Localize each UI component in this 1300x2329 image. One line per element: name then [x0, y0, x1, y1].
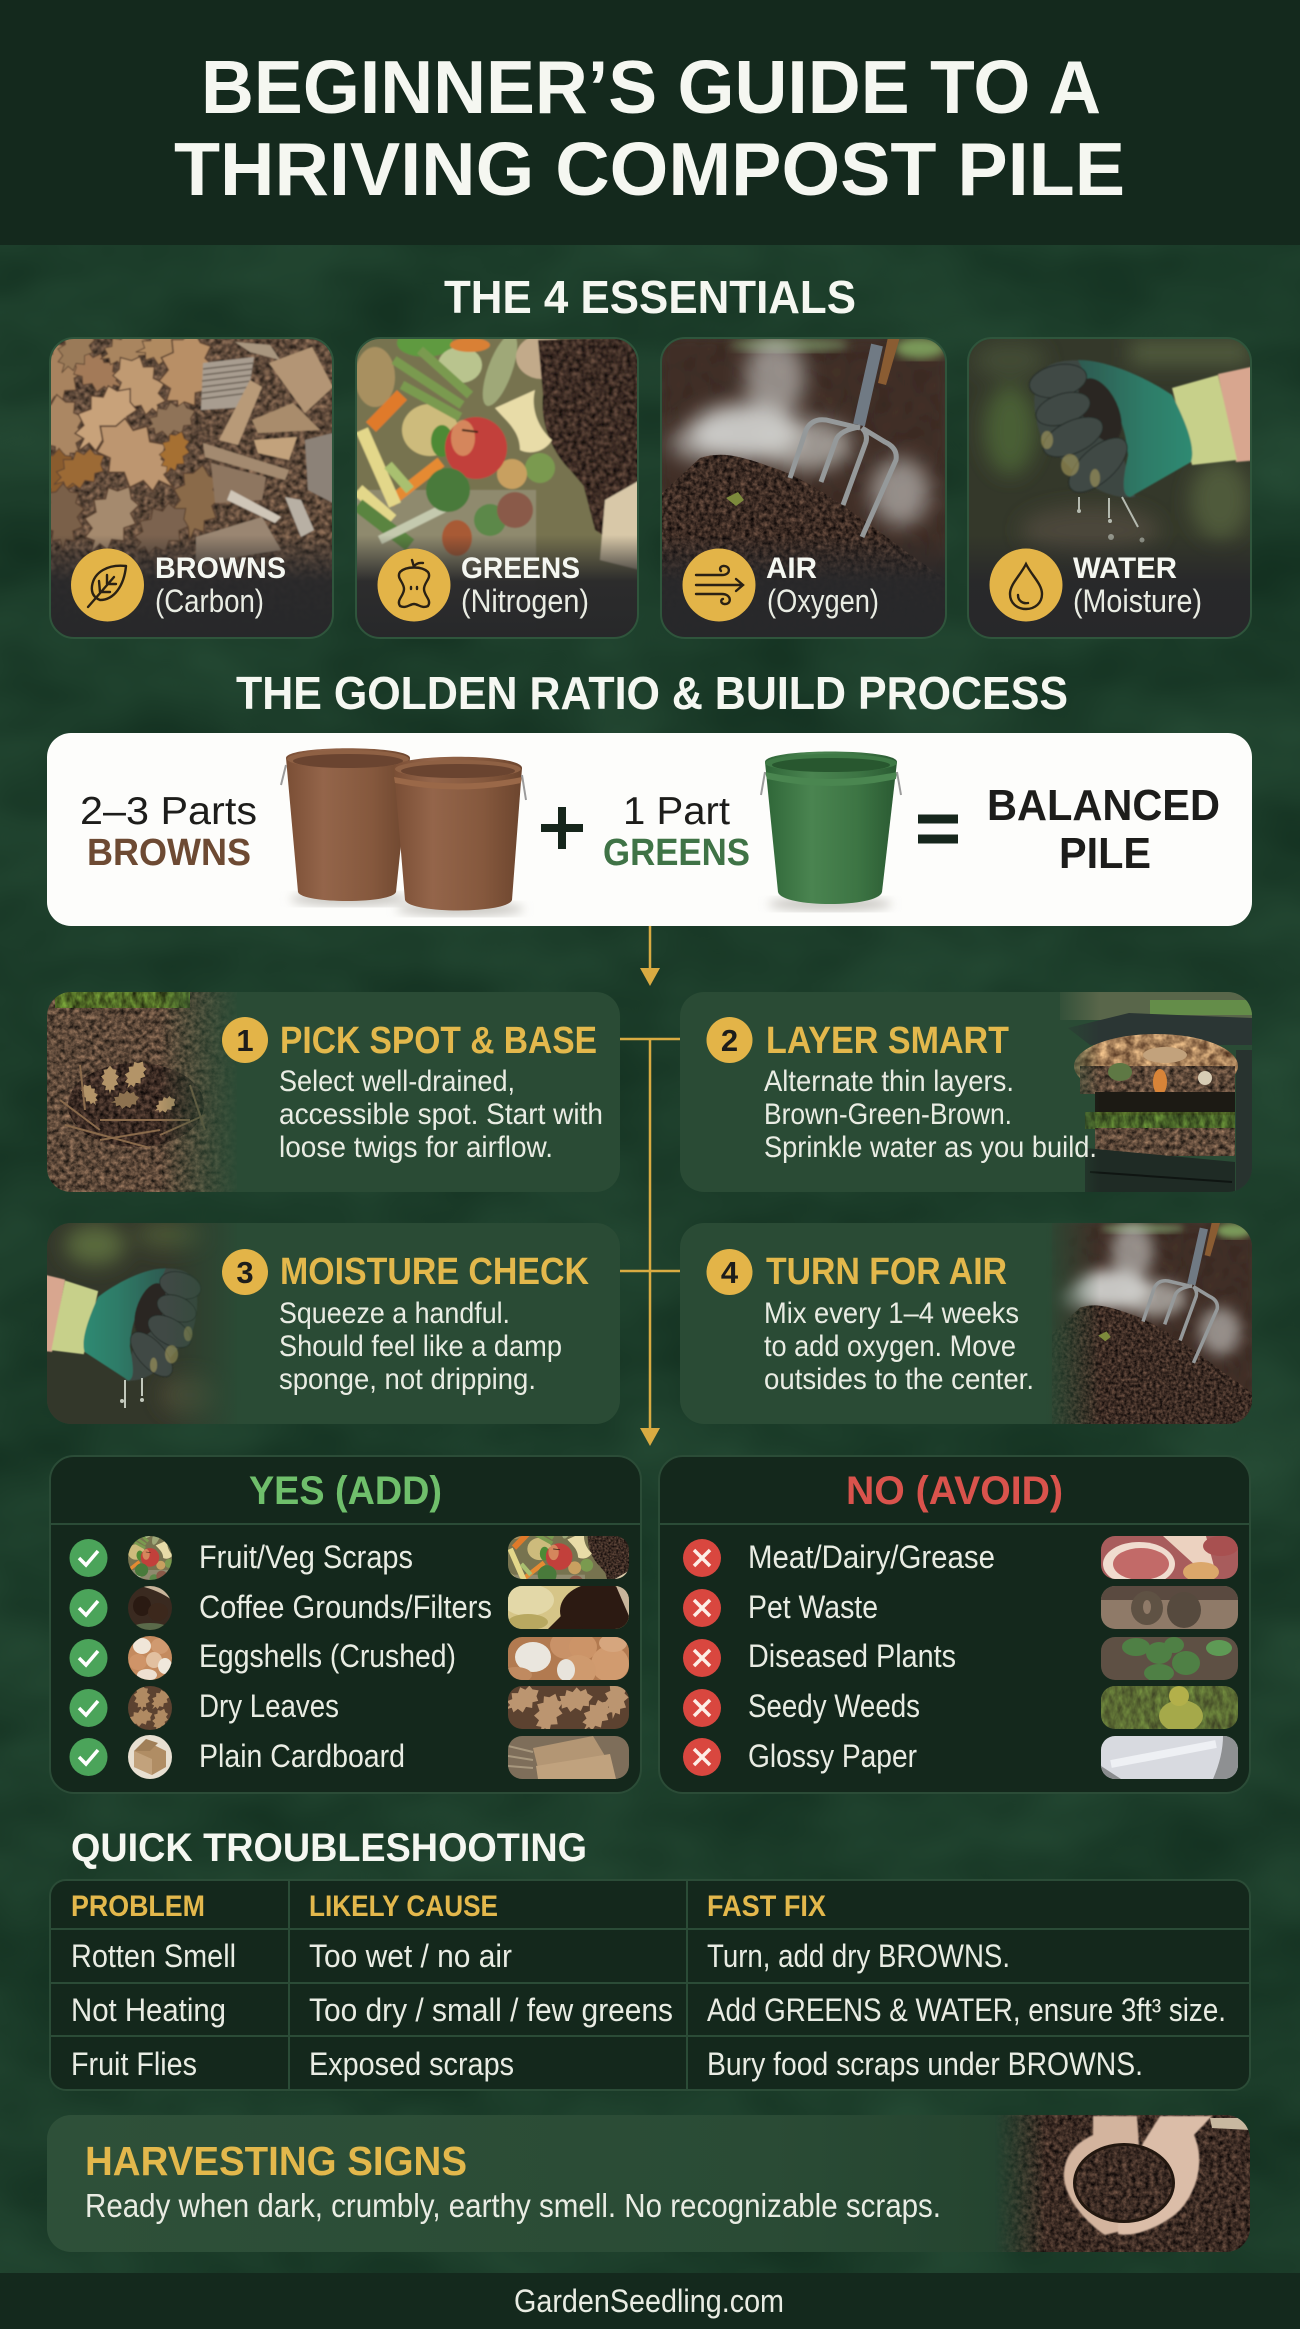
heading: yes: YES (ADD): [249, 1469, 442, 1513]
table row: rotten smell: [71, 1938, 1010, 1974]
step number 4: 4: [721, 1255, 739, 1290]
heading: harvesting signs: HARVESTING SIGNS: [85, 2138, 467, 2184]
step number 1: 1: [236, 1023, 254, 1058]
step text: [764, 1065, 1097, 1164]
row: fruit/veg scraps: [70, 1536, 629, 1580]
photo: hands holding compost: [995, 2115, 1250, 2252]
step number 3: [222, 1249, 268, 1295]
table row: not heating: Not Heating: [71, 1992, 226, 2028]
label: balanced pile: PILE: [1059, 829, 1151, 878]
table row: fruit flies: Exposed scraps: [309, 2046, 514, 2082]
row: glossy paper: Glossy Paper: [748, 1738, 917, 1774]
label: air: AIR: [766, 552, 817, 585]
table header: [71, 1890, 826, 1923]
label: 1 part greens: [603, 790, 750, 874]
table row: rotten smell: Rotten Smell: [71, 1938, 236, 1974]
title: [174, 45, 1125, 211]
step title: LAYER SMART: [766, 1020, 1009, 1062]
row: glossy paper: [683, 1736, 1238, 1779]
step number 4: [706, 1249, 752, 1295]
card: greens: [355, 329, 640, 640]
heading: quick troubleshooting: QUICK TROUBLESHOOTING: [71, 1826, 587, 1870]
table row: rotten smell: Too wet / no air: [309, 1938, 512, 1974]
table header: FAST FIX: [707, 1890, 826, 1923]
row: plain cardboard: [70, 1735, 629, 1779]
step 4 card: [680, 1223, 1253, 1435]
row: seedy weeds: Seedy Weeds: [748, 1688, 920, 1724]
label: browns: BROWNS: [155, 552, 286, 585]
step text: Should feel like a damp: [279, 1330, 562, 1363]
label: 2-3 parts browns: 2–3 Parts: [80, 790, 257, 833]
panel: harvesting signs: [47, 2115, 1250, 2252]
row: eggshells: [70, 1636, 629, 1680]
step text: accessible spot. Start with: [279, 1098, 603, 1131]
row: plain cardboard: Plain Cardboard: [199, 1738, 405, 1774]
label: greens: (Nitrogen): [461, 583, 589, 619]
table row: fruit flies: [71, 2046, 1143, 2082]
label: greens: [461, 552, 589, 619]
arrow: ratio to steps: [640, 926, 660, 986]
step 1 card: [47, 992, 620, 1192]
step text: [279, 1065, 603, 1164]
card: water: [968, 338, 1260, 638]
row: meat: Meat/Dairy/Grease: [748, 1539, 995, 1575]
step text: loose twigs for airflow.: [279, 1131, 553, 1164]
table: troubleshooting: [50, 1880, 1250, 2090]
step text: Brown-Green-Brown.: [764, 1098, 1012, 1131]
photo: twig base: [47, 992, 240, 1192]
label: browns: [155, 552, 286, 619]
text: harvesting signs: Ready when dark, crumbly, earthy smell. No recognizable scraps.: [85, 2187, 941, 2224]
step text: [279, 1297, 562, 1396]
icon: two brown buckets: [281, 748, 526, 916]
step text: Sprinkle water as you build.: [764, 1131, 1097, 1164]
step text: sponge, not dripping.: [279, 1363, 536, 1396]
table row: not heating: Add GREENS & WATER, ensure 3ft³ size.: [707, 1992, 1226, 2028]
label: air: (Oxygen): [767, 583, 879, 619]
plus sign: [541, 807, 583, 849]
step text: Mix every 1–4 weeks: [764, 1297, 1019, 1330]
heading: the 4 essentials: THE 4 ESSENTIALS: [444, 271, 856, 323]
step title: TURN FOR AIR: [766, 1251, 1007, 1293]
icon: water drop: [990, 548, 1062, 622]
table row: fruit flies: Fruit Flies: [71, 2046, 197, 2082]
label: greens: GREENS: [461, 552, 580, 585]
row: dry leaves: Dry Leaves: [199, 1688, 339, 1724]
label: 2-3 parts browns: [80, 790, 257, 874]
step 3 card: [35, 1221, 620, 1424]
process flow connector: [620, 1039, 680, 1446]
table row: rotten smell: Turn, add dry BROWNS.: [707, 1938, 1010, 1974]
equals sign: [918, 819, 958, 839]
label: air: [766, 552, 879, 619]
row: diseased plants: Diseased Plants: [748, 1638, 956, 1674]
panel: yes (add): [50, 1456, 641, 1793]
icon: wind: [682, 548, 756, 622]
table row: fruit flies: Bury food scraps under BROWNS.: [707, 2046, 1143, 2082]
row: coffee grounds: [70, 1586, 629, 1630]
card: browns: [49, 337, 334, 639]
step 2 card: [680, 992, 1252, 1192]
step title: MOISTURE CHECK: [280, 1251, 589, 1293]
label: 2-3 parts browns: BROWNS: [87, 832, 251, 874]
label: water: (Moisture): [1073, 583, 1202, 619]
step number 1: [222, 1017, 268, 1063]
heading: no: NO (AVOID): [846, 1469, 1063, 1513]
table row: not heating: [71, 1992, 1226, 2028]
heading: golden ratio: THE GOLDEN RATIO & BUILD PROCESS: [236, 667, 1068, 719]
card: air: [660, 337, 947, 640]
panel: no (avoid): [659, 1456, 1250, 1793]
label: water: [1073, 552, 1202, 619]
label: 1 part greens: 1 Part: [623, 790, 730, 833]
table header: PROBLEM: [71, 1890, 205, 1923]
icon: apple core: [378, 548, 450, 622]
step text: Squeeze a handful.: [279, 1297, 510, 1330]
photo: fork in steaming compost: [1052, 1223, 1252, 1424]
step text: to add oxygen. Move: [764, 1330, 1016, 1363]
footer: [0, 2273, 1300, 2329]
step title: PICK SPOT & BASE: [280, 1020, 597, 1062]
row: coffee grounds: Coffee Grounds/Filters: [199, 1589, 492, 1625]
step text: Alternate thin layers.: [764, 1065, 1014, 1098]
photo: gloved hand: [47, 1223, 213, 1424]
footer: GardenSeedling.com: [514, 2283, 784, 2319]
label: balanced pile: [987, 781, 1220, 878]
icon: green bucket: [761, 752, 901, 911]
label: balanced pile: BALANCED: [987, 781, 1220, 830]
step number 2: [706, 1017, 752, 1063]
photo: layered compost bin: [1050, 992, 1252, 1192]
step text: [764, 1297, 1034, 1396]
row: meat: [683, 1536, 1238, 1579]
row: seedy weeds: [683, 1686, 1238, 1732]
title: BEGINNER’S GUIDE TO A: [201, 45, 1101, 129]
title: THRIVING COMPOST PILE: [174, 127, 1125, 211]
step number 2: 2: [721, 1023, 738, 1058]
row: pet waste: Pet Waste: [748, 1589, 878, 1625]
icon: leaf: [71, 548, 144, 622]
table row: not heating: Too dry / small / few greens: [309, 1992, 673, 2028]
header band: [0, 0, 1300, 245]
row: pet waste: [683, 1586, 1238, 1629]
table header: LIKELY CAUSE: [309, 1890, 498, 1923]
step text: Select well-drained,: [279, 1065, 515, 1098]
row: dry leaves: [70, 1686, 629, 1730]
panel: golden ratio equation: [47, 733, 1252, 926]
row: fruit/veg scraps: Fruit/Veg Scraps: [199, 1539, 413, 1575]
label: water: WATER: [1073, 552, 1177, 585]
step text: outsides to the center.: [764, 1363, 1034, 1396]
row: diseased plants: [683, 1637, 1238, 1682]
label: browns: (Carbon): [155, 583, 264, 619]
label: 1 part greens: GREENS: [603, 832, 750, 874]
step number 3: 3: [236, 1255, 254, 1290]
row: eggshells: Eggshells (Crushed): [199, 1638, 456, 1674]
